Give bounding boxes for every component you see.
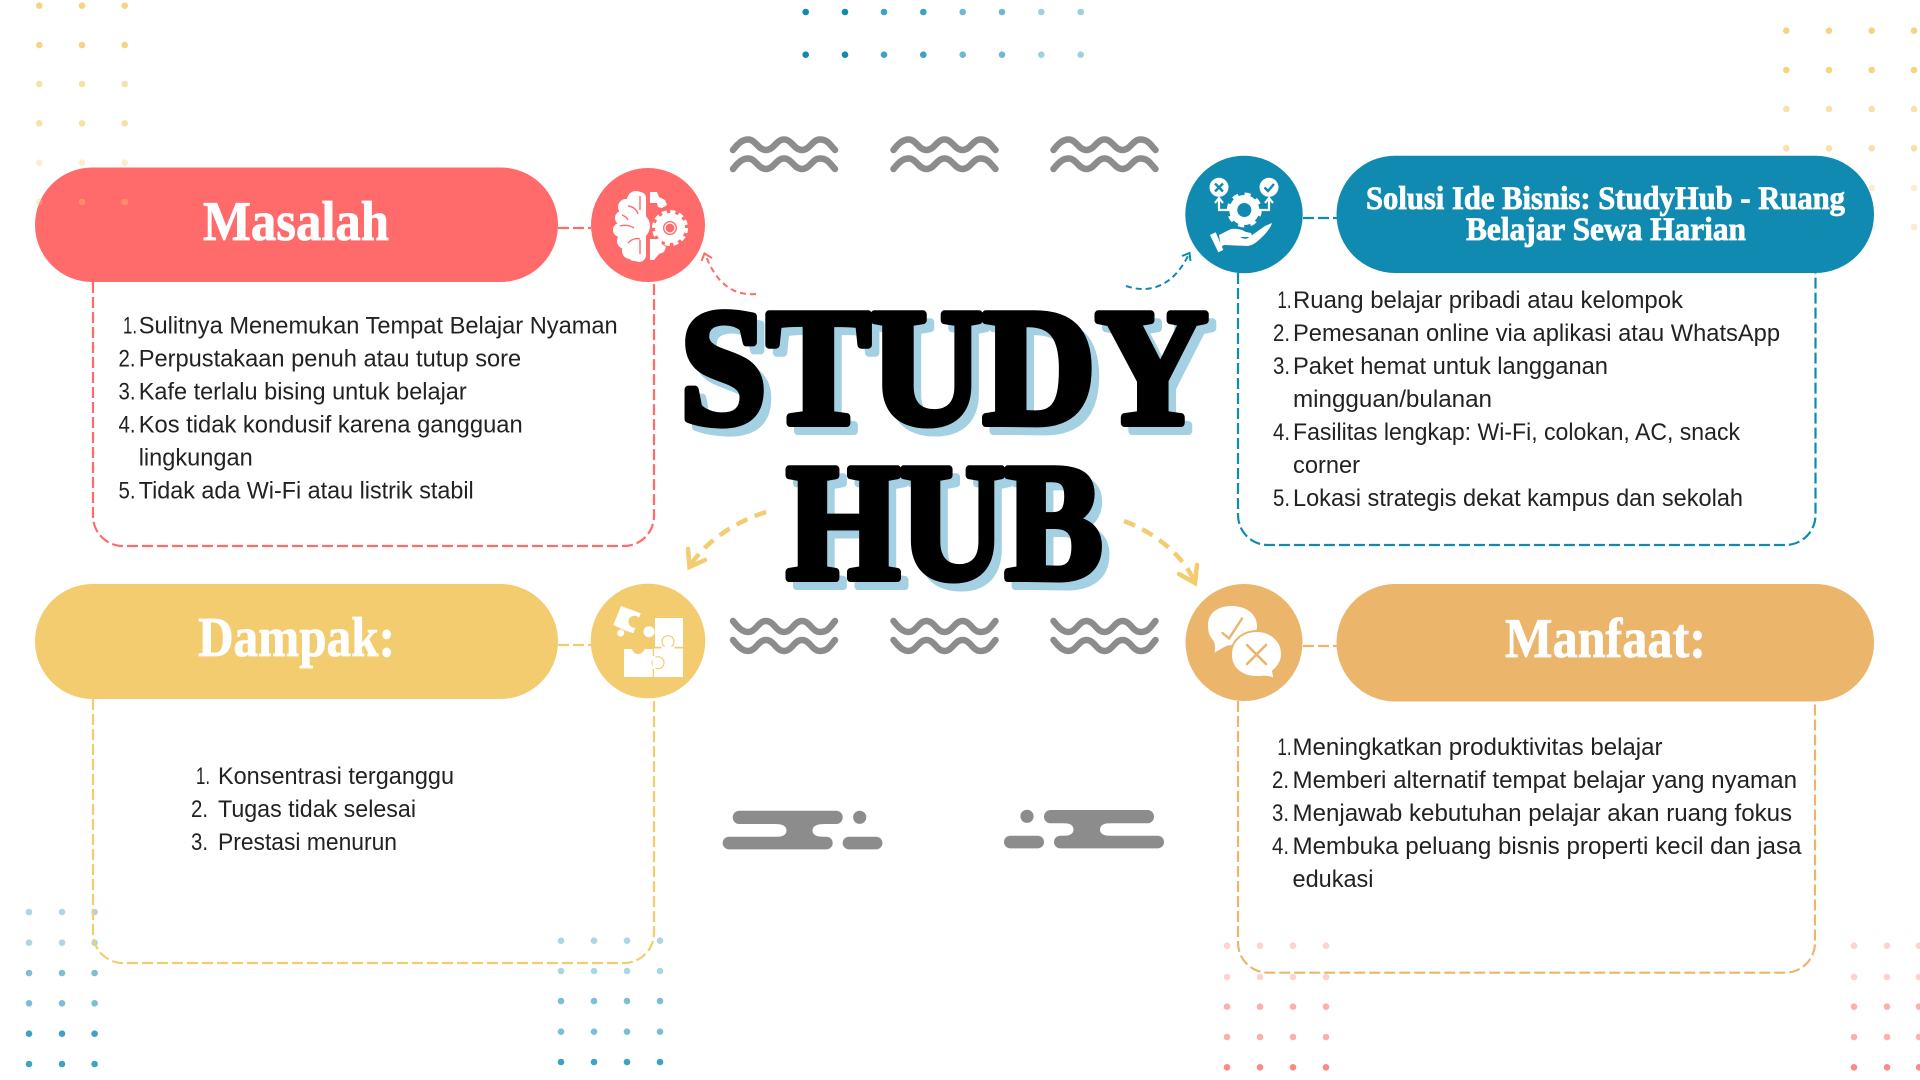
manfaat dashed box (1238, 701, 1815, 973)
solusi list: 5. (1273, 485, 1290, 512)
title text (680, 275, 1208, 614)
title text: STUDY (680, 275, 1208, 459)
masalah list: 3. (118, 379, 136, 406)
masalah heading: Masalah (203, 191, 389, 253)
solusi heading (1366, 181, 1845, 248)
panel: solusi (1185, 156, 1874, 545)
masalah dashed box (93, 282, 654, 546)
solusi heading: Belajar Sewa Harian (1466, 212, 1746, 248)
masalah list: Perpustakaan penuh atau tutup sore (139, 346, 521, 373)
panel: manfaat (1186, 584, 1874, 973)
dampak list (191, 763, 454, 856)
dampak list: Konsentrasi terganggu (218, 763, 454, 790)
solusi list: Fasilitas lengkap: Wi-Fi, colokan, AC, snack (1293, 419, 1741, 446)
masalah list: Kafe terlalu bising untuk belajar (139, 379, 467, 406)
solusi list: Lokasi strategis dekat kampus dan sekolah (1293, 485, 1743, 512)
solusi list: 4. (1273, 419, 1290, 446)
decoration: lower waves (733, 621, 1156, 651)
panel: dampak (35, 584, 705, 963)
manfaat list: 3. (1272, 800, 1289, 827)
arrow: pink to masalah (702, 254, 756, 294)
masalah heading pill (35, 168, 558, 282)
dots: bottom right pink (1227, 946, 1919, 1067)
dampak dashed box (93, 699, 654, 963)
icon: puzzle pieces (591, 584, 705, 698)
dampak heading: Dampak: (198, 607, 395, 669)
manfaat list: edukasi (1292, 866, 1374, 893)
masalah list: Sulitnya Menemukan Tempat Belajar Nyaman (139, 313, 618, 340)
manfaat heading: Manfaat: (1505, 608, 1706, 670)
title shadow: STUDY (688, 283, 1216, 467)
solusi list (1273, 287, 1780, 512)
dots: top right yellow (1786, 31, 1914, 227)
title: study hub (680, 275, 1216, 622)
masalah list (118, 313, 618, 504)
manfaat list: Memberi alternatif tempat belajar yang nyaman (1292, 767, 1797, 794)
solusi list: Paket hemat untuk langganan (1293, 353, 1608, 380)
dots: top center blue (806, 12, 1081, 55)
solusi list: 1. (1278, 287, 1292, 314)
solusi list: corner (1293, 452, 1360, 479)
arrow: yellow to manfaat (1124, 521, 1197, 583)
masalah list: lingkungan (139, 445, 253, 472)
masalah connector (558, 227, 591, 229)
manfaat heading pill (1336, 584, 1874, 702)
solusi list: 2. (1273, 320, 1290, 347)
manfaat list: 1. (1278, 734, 1292, 761)
solusi dashed box (1238, 273, 1816, 545)
dots: top left yellow (39, 6, 125, 202)
decoration: grey bars right (1004, 810, 1164, 848)
title text: HUB (786, 430, 1102, 614)
solusi heading pill (1336, 156, 1874, 273)
dampak list: 1. (196, 763, 210, 790)
masalah list: 5. (118, 478, 136, 504)
solusi heading: Solusi Ide Bisnis: StudyHub - Ruang (1366, 181, 1845, 217)
icon: hand with gear and choices (1185, 156, 1303, 273)
masalah list: Kos tidak kondusif karena gangguan (139, 412, 523, 439)
manfaat list: Membuka peluang bisnis properti kecil dan jasa (1292, 833, 1802, 860)
arrow: blue to solusi (1126, 253, 1190, 289)
masalah list: 2. (118, 346, 136, 373)
icon: chat bubbles check and cross (1186, 584, 1302, 701)
solusi list: Ruang belajar pribadi atau kelompok (1293, 287, 1684, 314)
decoration: grey bars left (723, 811, 882, 849)
manfaat list: Meningkatkan produktivitas belajar (1292, 734, 1662, 761)
decoration: upper waves (733, 140, 1156, 169)
masalah list: Tidak ada Wi-Fi atau listrik stabil (139, 478, 474, 504)
manfaat list: 4. (1272, 833, 1289, 860)
title shadow: HUB (794, 438, 1110, 622)
dampak list: 2. (191, 796, 208, 823)
icon: brain and gears (591, 168, 705, 282)
solusi connector (1303, 217, 1337, 219)
solusi list: Pemesanan online via aplikasi atau WhatsApp (1293, 320, 1780, 347)
masalah list: 1. (123, 313, 137, 340)
dampak heading pill (35, 584, 558, 699)
manfaat connector (1303, 645, 1337, 647)
manfaat list: 2. (1272, 767, 1289, 794)
title shadow (688, 283, 1216, 622)
dampak list: Tugas tidak selesai (218, 796, 416, 823)
dampak connector (558, 644, 591, 646)
arrow: yellow to dampak (688, 512, 766, 567)
panel: masalah (35, 168, 705, 546)
dampak list: 3. (191, 829, 208, 856)
solusi list: mingguan/bulanan (1293, 386, 1492, 413)
manfaat list: Menjawab kebutuhan pelajar akan ruang fokus (1292, 800, 1792, 827)
masalah list: 4. (118, 412, 136, 439)
dots: bottom left blue (29, 912, 95, 1064)
dampak list: Prestasi menurun (218, 829, 397, 856)
manfaat list (1272, 734, 1802, 893)
solusi list: 3. (1273, 353, 1290, 380)
dots: bottom middle blue (561, 941, 660, 1062)
